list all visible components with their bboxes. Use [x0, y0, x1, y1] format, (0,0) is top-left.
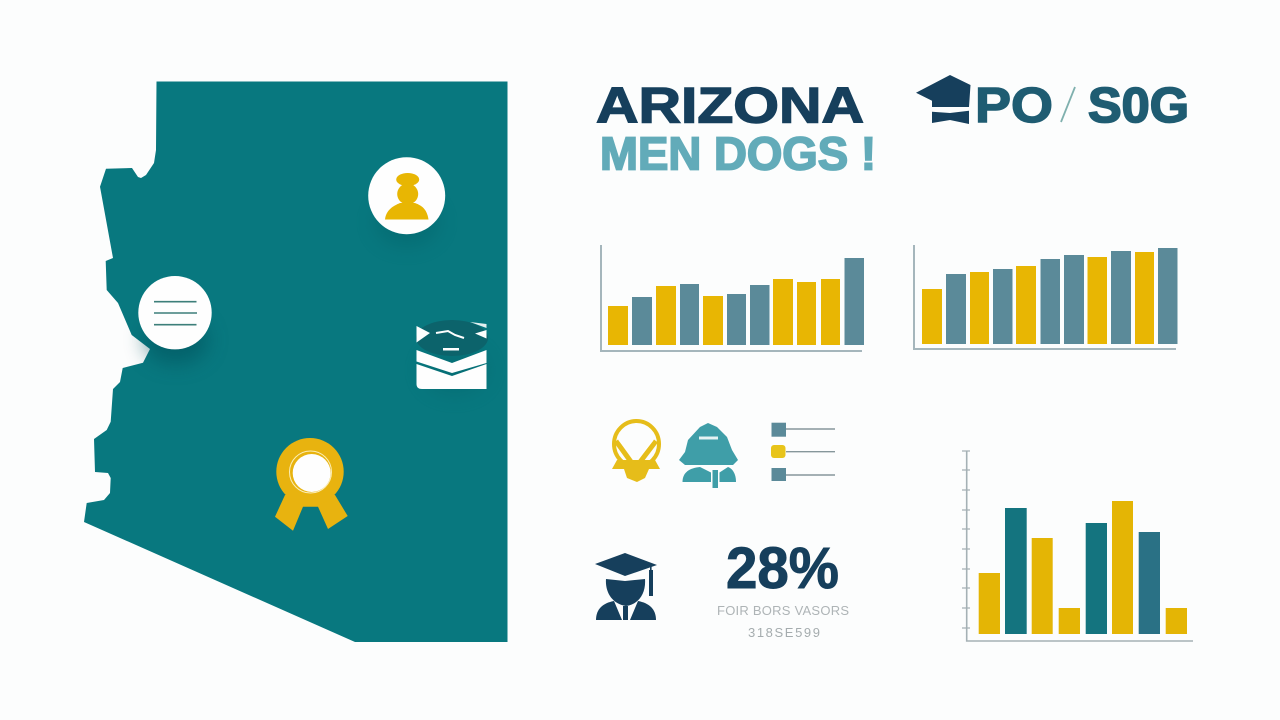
heading: ARIZONA MEN DOGS	[596, 78, 876, 180]
icon: teal person	[679, 423, 738, 488]
icon: book stack	[416, 320, 488, 394]
bar chart: right top	[914, 245, 1178, 349]
subtitle line: MEN DOGS !	[600, 128, 876, 180]
icon: award ribbon	[275, 438, 348, 531]
bar chart: bottom right	[962, 451, 1193, 641]
stat caption line 2: 318SE599	[748, 625, 820, 640]
stat: 28%	[717, 536, 849, 640]
stat value: 28%	[726, 536, 839, 601]
icon: yellow medal	[612, 421, 660, 482]
logo slash	[1061, 87, 1075, 122]
logo text PO: PO	[975, 79, 1053, 133]
icon: list in circle	[138, 276, 212, 364]
icon: cap logo	[916, 75, 970, 124]
panel: Arizona map	[84, 82, 508, 642]
icon: person in circle	[368, 157, 445, 246]
title line: ARIZONA	[596, 78, 864, 134]
icon: graduate	[595, 553, 657, 620]
legend list	[771, 423, 835, 481]
bar chart: left top	[601, 245, 864, 351]
stat caption line 1: FOIR BORS VASORS	[717, 603, 849, 618]
heading: PO / S0G with cap logo	[916, 75, 1189, 133]
map silhouette	[84, 82, 508, 642]
logo text S0G: S0G	[1088, 79, 1189, 133]
